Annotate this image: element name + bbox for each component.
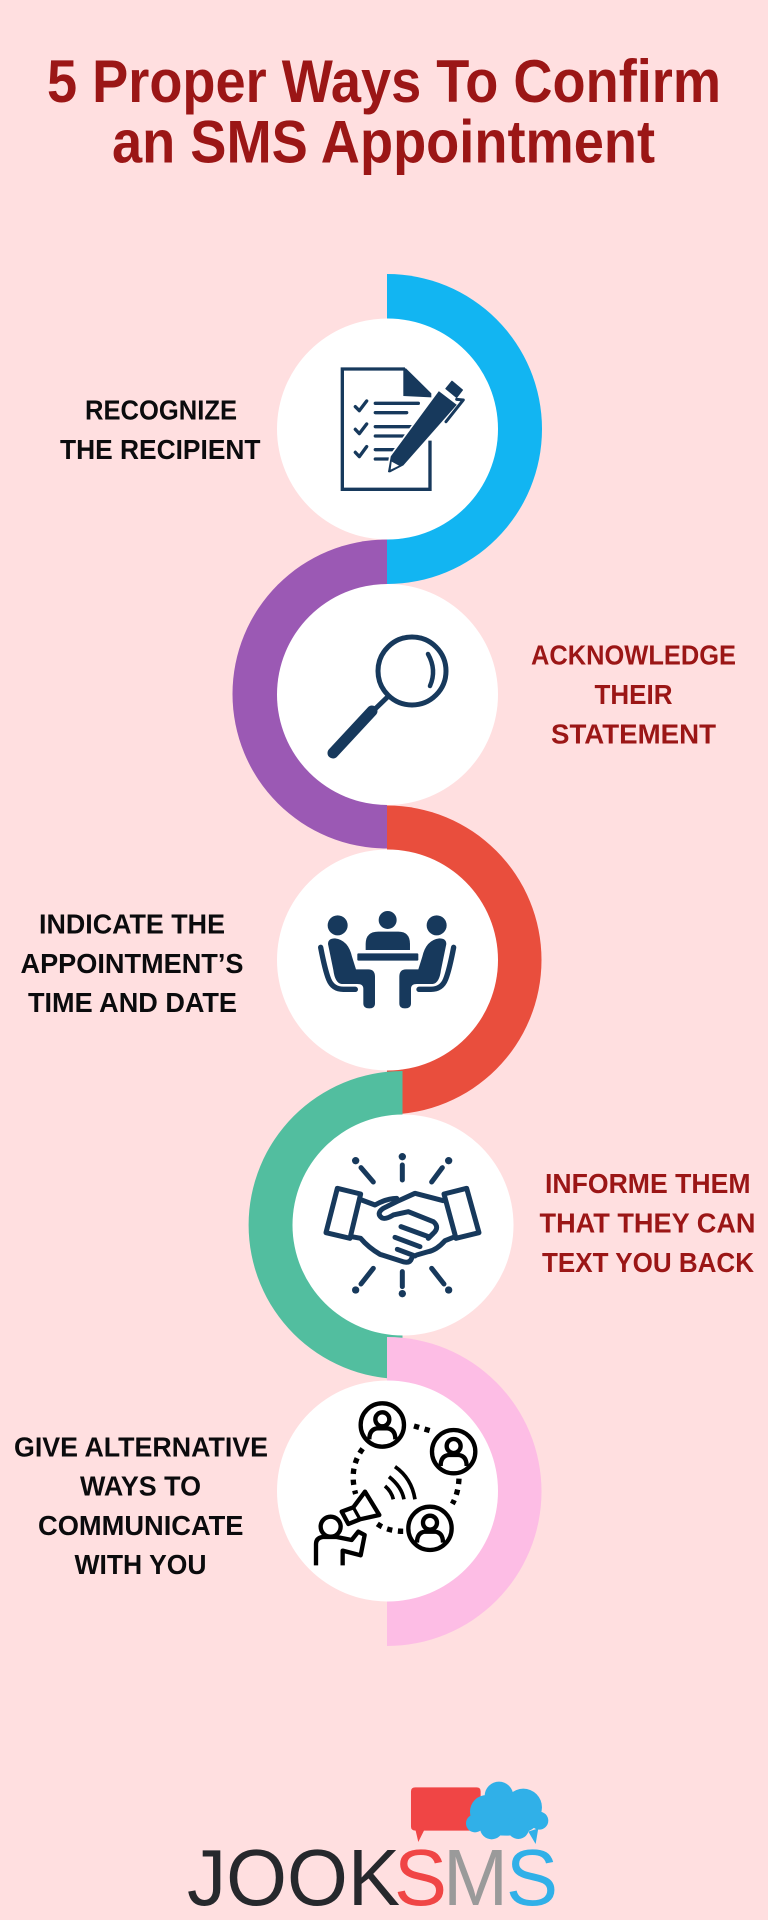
icon: megaphone and contacts	[316, 1403, 475, 1565]
step 2: acknowledge their statement	[233, 540, 736, 848]
step 3: indicate the time and date	[20, 806, 542, 1114]
label: indicate the time and date: INDICATE THE	[39, 908, 225, 940]
logo icon: red speech bubble	[411, 1787, 481, 1842]
logo wordmark: M	[443, 1833, 508, 1920]
label: inform them: INFORME THEM	[545, 1168, 750, 1199]
label: indicate the time and date	[20, 908, 244, 1018]
label: acknowledge their statement: ACKNOWLEDGE	[531, 640, 736, 670]
logo icon: blue cloud	[466, 1782, 548, 1844]
label: recognize the recipient: RECOGNIZE	[85, 394, 237, 426]
logo: JookSMS	[187, 1782, 558, 1920]
pink half ring	[387, 1337, 542, 1646]
white circle 1	[277, 318, 498, 540]
icon: checklist and pen	[342, 368, 463, 489]
step 4: inform them they can text back	[249, 1071, 755, 1379]
label: inform them: TEXT YOU BACK	[542, 1247, 754, 1278]
logo wordmark	[187, 1833, 558, 1920]
label: inform them: THAT THEY CAN	[540, 1208, 756, 1238]
label: acknowledge their statement	[531, 640, 736, 750]
blue half ring	[387, 274, 542, 584]
icon: meeting at table	[321, 911, 454, 1008]
label: give alternative ways: COMMUNICATE	[38, 1510, 244, 1541]
label: acknowledge their statement: STATEMENT	[551, 718, 716, 750]
white circle 4	[292, 1114, 514, 1336]
logo wordmark: JOOK	[187, 1833, 400, 1920]
label: recognize the recipient	[60, 394, 261, 465]
white circle 3	[277, 850, 498, 1070]
title	[47, 48, 721, 176]
red half ring	[387, 806, 542, 1114]
logo wordmark: S	[506, 1833, 558, 1920]
green half ring	[249, 1071, 402, 1379]
label: recognize the recipient: THE RECIPIENT	[60, 434, 261, 465]
icon: handshake	[326, 1153, 479, 1297]
step 1: recognize the recipient	[60, 274, 542, 584]
label: give alternative ways: WITH YOU	[74, 1549, 206, 1580]
white circle 5	[277, 1380, 498, 1602]
label: give alternative ways	[14, 1432, 268, 1580]
label: indicate the time and date: TIME AND DATE	[28, 987, 237, 1018]
title: an SMS Appointment	[112, 108, 655, 176]
label: inform them	[540, 1168, 756, 1278]
purple half ring	[233, 540, 387, 848]
logo wordmark: S	[394, 1833, 447, 1920]
label: acknowledge their statement: THEIR	[594, 679, 673, 710]
label: give alternative ways: GIVE ALTERNATIVE	[14, 1432, 268, 1462]
icon: magnifying glass	[333, 637, 446, 753]
label: give alternative ways: WAYS TO	[80, 1470, 201, 1502]
step 5: give alternative ways	[14, 1337, 542, 1646]
white circle 2	[277, 584, 498, 805]
label: indicate the time and date: APPOINTMENT’S	[20, 948, 244, 979]
